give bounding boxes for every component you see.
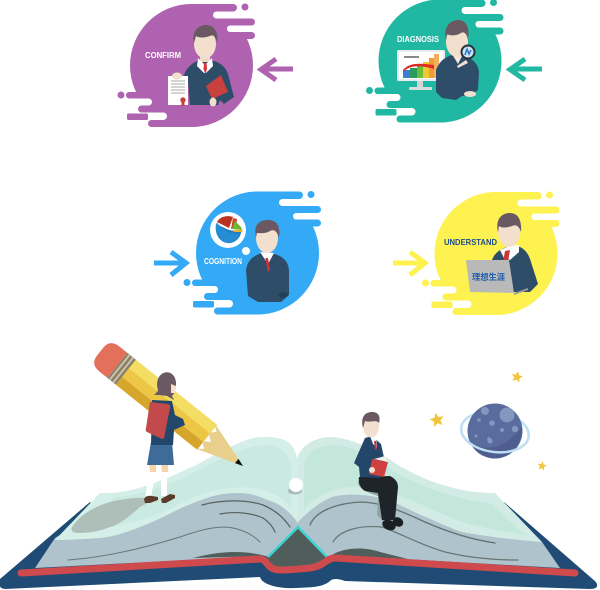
- person holding certificate and book: [168, 25, 234, 106]
- page curves: [68, 501, 518, 560]
- arrow: yellow: [393, 252, 425, 275]
- page block left: [35, 480, 298, 568]
- ferrule: [107, 353, 136, 385]
- page block right: [298, 480, 560, 568]
- bookmark ball: [288, 478, 303, 494]
- head: [363, 414, 379, 438]
- planet body: [468, 404, 522, 458]
- open book: [0, 437, 597, 589]
- yellow blob background: [404, 192, 578, 315]
- panel: understand: [404, 192, 578, 315]
- label: CONFIRM: CONFIRM: [145, 51, 181, 60]
- lower page shadows: [193, 549, 408, 559]
- red book: [369, 459, 388, 477]
- jacket: [354, 436, 385, 478]
- pencil lead: [235, 459, 245, 468]
- backpack: [146, 402, 170, 439]
- person with magnifier: [436, 20, 479, 100]
- skirt: [147, 442, 174, 465]
- legs: [149, 463, 168, 472]
- laptop text: 理想生涯: [472, 272, 505, 282]
- star right: [537, 460, 547, 471]
- hair: [154, 372, 176, 400]
- pencil body: [116, 360, 217, 450]
- book pages: [374, 456, 388, 462]
- label: COGNITION: COGNITION: [204, 257, 242, 266]
- arrow: blue: [154, 252, 186, 275]
- pencil cone: [194, 422, 253, 478]
- star left: [428, 411, 445, 427]
- face: [171, 384, 176, 393]
- trousers: [359, 476, 398, 520]
- star top: [510, 370, 524, 383]
- shoes: [381, 515, 405, 532]
- shoes: [144, 494, 175, 503]
- label: DIAGNOSIS: DIAGNOSIS: [397, 34, 439, 44]
- jacket and arm: [151, 400, 185, 445]
- ring back: [459, 407, 531, 457]
- arrow: purple: [261, 59, 293, 80]
- hair: [362, 412, 380, 428]
- craters: [474, 407, 518, 444]
- panel: cognition: [166, 191, 339, 314]
- boy reading book: [354, 412, 405, 532]
- panel: diagnosis: [348, 0, 522, 122]
- person with hand on chin: [246, 220, 289, 302]
- teal spine lines: [268, 527, 327, 557]
- girl with backpack: [144, 372, 185, 503]
- gutter: [262, 527, 332, 572]
- panel: confirm: [100, 4, 273, 127]
- seat shadow: [358, 480, 384, 522]
- planet: [459, 404, 531, 458]
- purple blob background: [100, 4, 273, 127]
- shadow of girl: [71, 498, 157, 533]
- teal blob background: [348, 0, 522, 122]
- pencil: [90, 339, 253, 478]
- monitor with colored chart: [397, 50, 445, 90]
- shirt and tie: [370, 435, 377, 448]
- right page surface: [297, 437, 542, 542]
- ring front: [461, 427, 529, 452]
- arrow: teal: [510, 59, 542, 80]
- blue blob background: [166, 191, 339, 314]
- red band: [21, 558, 575, 573]
- socks: [145, 470, 167, 497]
- label: UNDERSTAND: UNDERSTAND: [444, 237, 497, 247]
- person with laptop: [492, 213, 538, 292]
- left page surface: [55, 437, 298, 540]
- eraser: [90, 339, 127, 378]
- book cover: [0, 502, 597, 589]
- thought bubble with pie chart: [210, 212, 250, 255]
- laptop: [466, 260, 528, 295]
- hand: [369, 467, 375, 473]
- stars: [428, 370, 547, 471]
